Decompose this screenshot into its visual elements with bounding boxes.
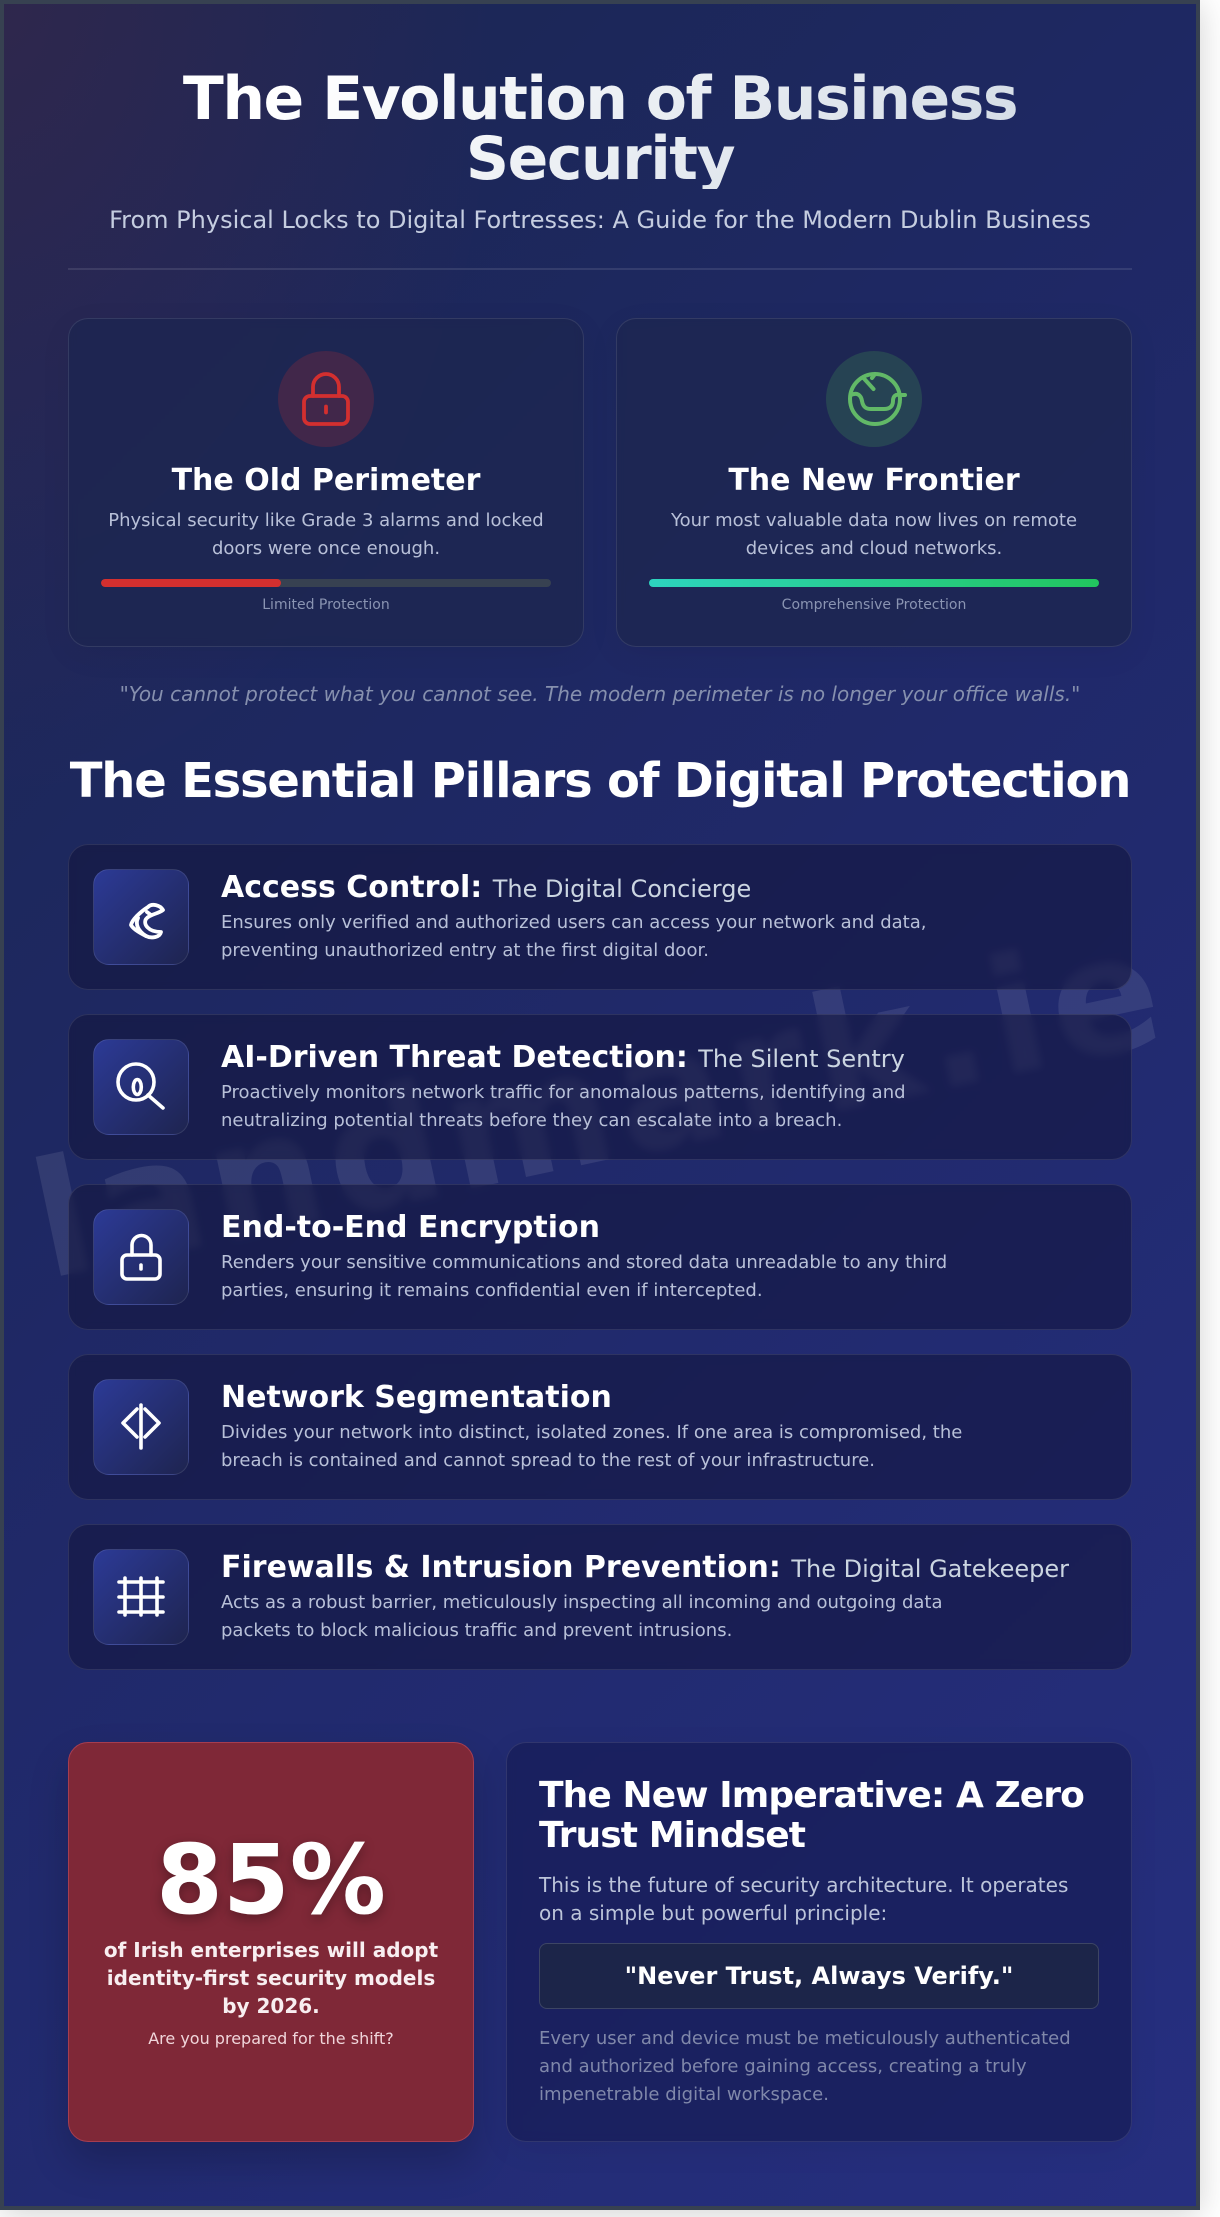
intro text xyxy=(538,1873,1068,1925)
description xyxy=(221,1252,947,1301)
closing text: impenetrable digital workspace. xyxy=(539,2084,829,2105)
description: Divides your network into distinct, isolated zones. If one area is compromised, the xyxy=(221,1422,962,1443)
description xyxy=(221,912,926,961)
bar label: Limited Protection xyxy=(262,597,390,613)
icon: green cloud dial xyxy=(826,351,922,447)
panel: the old perimeter xyxy=(68,318,584,647)
description: Your most valuable data now lives on remote xyxy=(671,510,1077,531)
description: Renders your sensitive communications and stored data unreadable to any third xyxy=(221,1252,947,1273)
icon: key scribble xyxy=(93,869,189,965)
title xyxy=(68,69,1132,189)
heading: Access Control: The Digital Concierge xyxy=(221,870,751,905)
description: Physical security like Grade 3 alarms and locked xyxy=(108,510,544,531)
watermark: landmark.ie xyxy=(17,893,1183,1316)
icon: magnifier xyxy=(93,1039,189,1135)
bar label: Comprehensive Protection xyxy=(782,597,966,613)
heading: The New Frontier xyxy=(728,463,1020,498)
heading: The New Imperative: A Zero xyxy=(539,1775,1084,1816)
title: The Evolution of Business xyxy=(183,64,1017,134)
description xyxy=(221,1422,962,1471)
motto box: "Never Trust, Always Verify." xyxy=(625,1962,1013,1990)
description: breach is contained and cannot spread to the rest of your infrastructure. xyxy=(221,1450,875,1471)
pillar: firewalls xyxy=(68,1524,1132,1670)
description: preventing unauthorized entry at the first digital door. xyxy=(221,940,709,961)
big number: 85% xyxy=(156,1824,386,1936)
statistic text xyxy=(104,1938,438,2018)
icon: firewall grid xyxy=(93,1549,189,1645)
description: Ensures only verified and authorized users can access your network and data, xyxy=(221,912,926,933)
pillar: threat detection xyxy=(68,1014,1132,1160)
description xyxy=(221,1082,906,1131)
closing text xyxy=(539,2028,1071,2105)
header divider xyxy=(68,268,1132,270)
pillar: encryption xyxy=(68,1184,1132,1330)
closing text: Every user and device must be meticulously authenticated xyxy=(539,2028,1071,2049)
protection bar xyxy=(649,579,1099,587)
description xyxy=(221,1592,943,1641)
description: parties, ensuring it remains confidential even if intercepted. xyxy=(221,1280,763,1301)
panel: zero trust xyxy=(506,1742,1132,2142)
icon: red padlock xyxy=(278,351,374,447)
statistic text: identity-first security models xyxy=(107,1966,435,1990)
description: doors were once enough. xyxy=(212,538,440,559)
title: Security xyxy=(466,124,734,194)
heading: End-to-End Encryption xyxy=(221,1210,600,1245)
heading: Trust Mindset xyxy=(539,1815,805,1856)
subtitle: From Physical Locks to Digital Fortresses: A Guide for the Modern Dublin Business xyxy=(109,206,1091,234)
protection bar xyxy=(101,579,551,587)
icon: split diamond xyxy=(93,1379,189,1475)
section heading: The Essential Pillars of Digital Protection xyxy=(70,753,1130,809)
panel: 85 percent statistic xyxy=(68,1742,474,2142)
intro text: This is the future of security architecture. It operates xyxy=(539,1873,1068,1897)
prompt: Are you prepared for the shift? xyxy=(148,2029,394,2048)
heading: Firewalls & Intrusion Prevention: The Digital Gatekeeper xyxy=(221,1550,1069,1585)
icon: padlock xyxy=(93,1209,189,1305)
description xyxy=(108,510,544,559)
description: packets to block malicious traffic and prevent intrusions. xyxy=(221,1620,732,1641)
heading xyxy=(539,1775,1084,1856)
quote: "You cannot protect what you cannot see. The modern perimeter is no longer your office walls." xyxy=(120,682,1080,706)
statistic text: by 2026. xyxy=(222,1994,320,2018)
panel: the new frontier xyxy=(616,318,1132,647)
description: Proactively monitors network traffic for anomalous patterns, identifying and xyxy=(221,1082,906,1103)
pillar: segmentation xyxy=(68,1354,1132,1500)
description xyxy=(671,510,1077,559)
description: neutralizing potential threats before they can escalate into a breach. xyxy=(221,1110,842,1131)
heading: AI-Driven Threat Detection: The Silent Sentry xyxy=(221,1040,905,1075)
statistic text: of Irish enterprises will adopt xyxy=(104,1938,438,1962)
motto box xyxy=(539,1943,1099,2009)
closing text: and authorized before gaining access, creating a truly xyxy=(539,2056,1027,2077)
heading: Network Segmentation xyxy=(221,1380,612,1415)
heading: The Old Perimeter xyxy=(172,463,480,498)
description: devices and cloud networks. xyxy=(746,538,1002,559)
pillar: access control xyxy=(68,844,1132,990)
description: Acts as a robust barrier, meticulously inspecting all incoming and outgoing data xyxy=(221,1592,943,1613)
intro text: on a simple but powerful principle: xyxy=(539,1901,887,1925)
